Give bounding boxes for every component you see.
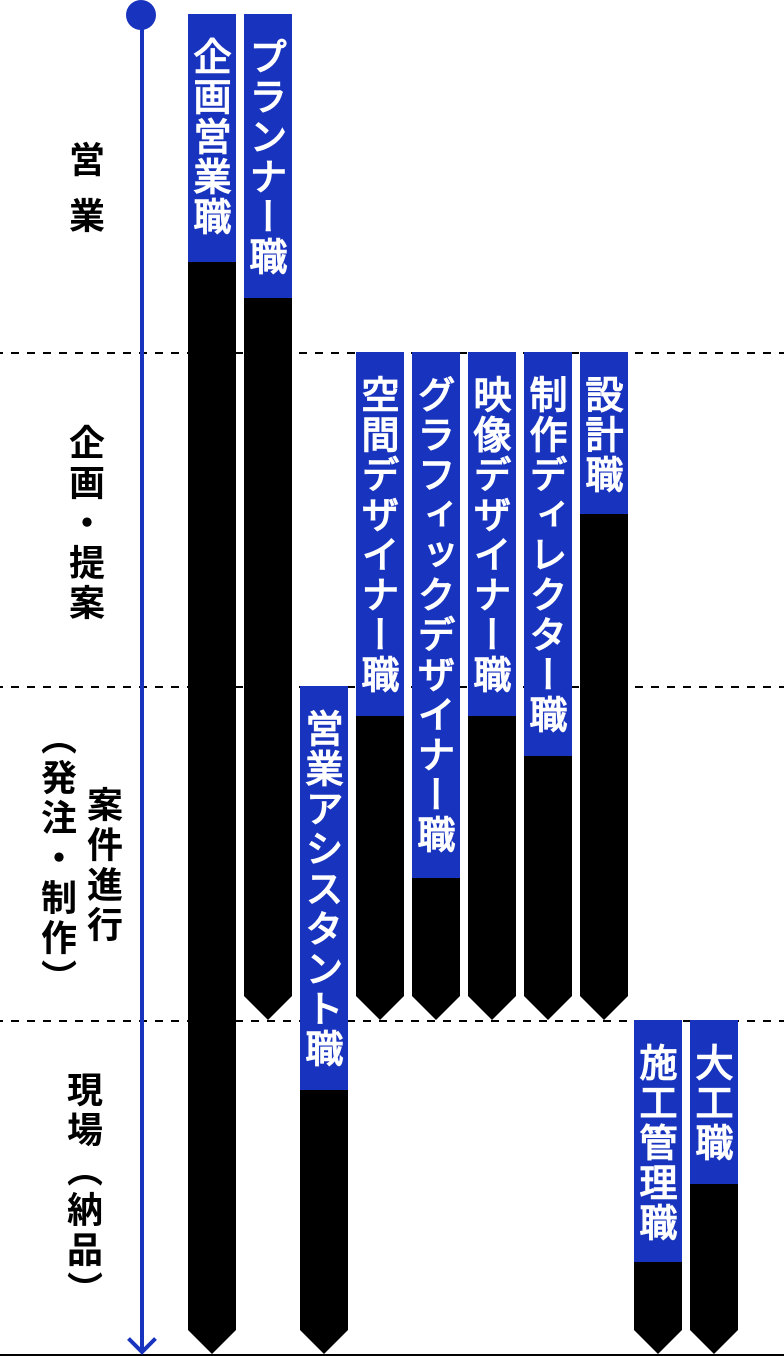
bar: video designer role <box>468 352 516 1020</box>
bar: spatial designer role <box>356 352 404 1020</box>
bar: carpenter role <box>690 1020 738 1354</box>
bar: carpenter role: 大工職 <box>689 1043 731 1163</box>
bar: graphic designer role: グラフィックデザイナー職 <box>411 375 453 855</box>
bar: construction manager role <box>634 1020 682 1354</box>
bar: construction manager role: 施工管理職 <box>633 1043 675 1243</box>
bar: planner role <box>244 14 292 1020</box>
bar: spatial designer role: 空間デザイナー職 <box>355 375 397 695</box>
timeline arrow <box>126 0 157 1355</box>
bar: production director role: 制作ディレクター職 <box>523 375 565 735</box>
bar: sales planning role <box>188 14 236 1354</box>
stage label: sales: 営業 <box>64 141 105 253</box>
stage label: project progress: 案件進行 <box>82 786 123 946</box>
bar: sales assistant role <box>300 686 348 1354</box>
bar: design engineer role <box>580 352 628 1020</box>
bar: planner role: プランナー職 <box>243 37 285 277</box>
bar: production director role <box>524 352 572 1020</box>
stage label: planning and proposal: 企画・提案 <box>64 424 105 624</box>
bar: video designer role: 映像デザイナー職 <box>467 375 509 695</box>
stage label: on-site and delivery: 現場（納品） <box>62 1071 103 1311</box>
bar: graphic designer role <box>412 352 460 1020</box>
bar: sales planning role: 企画営業職 <box>187 37 229 237</box>
bar: sales assistant role: 営業アシスタント職 <box>299 709 341 1069</box>
stage label: ordering and production: （発注・制作） <box>36 719 77 999</box>
bar: design engineer role: 設計職 <box>579 375 621 495</box>
